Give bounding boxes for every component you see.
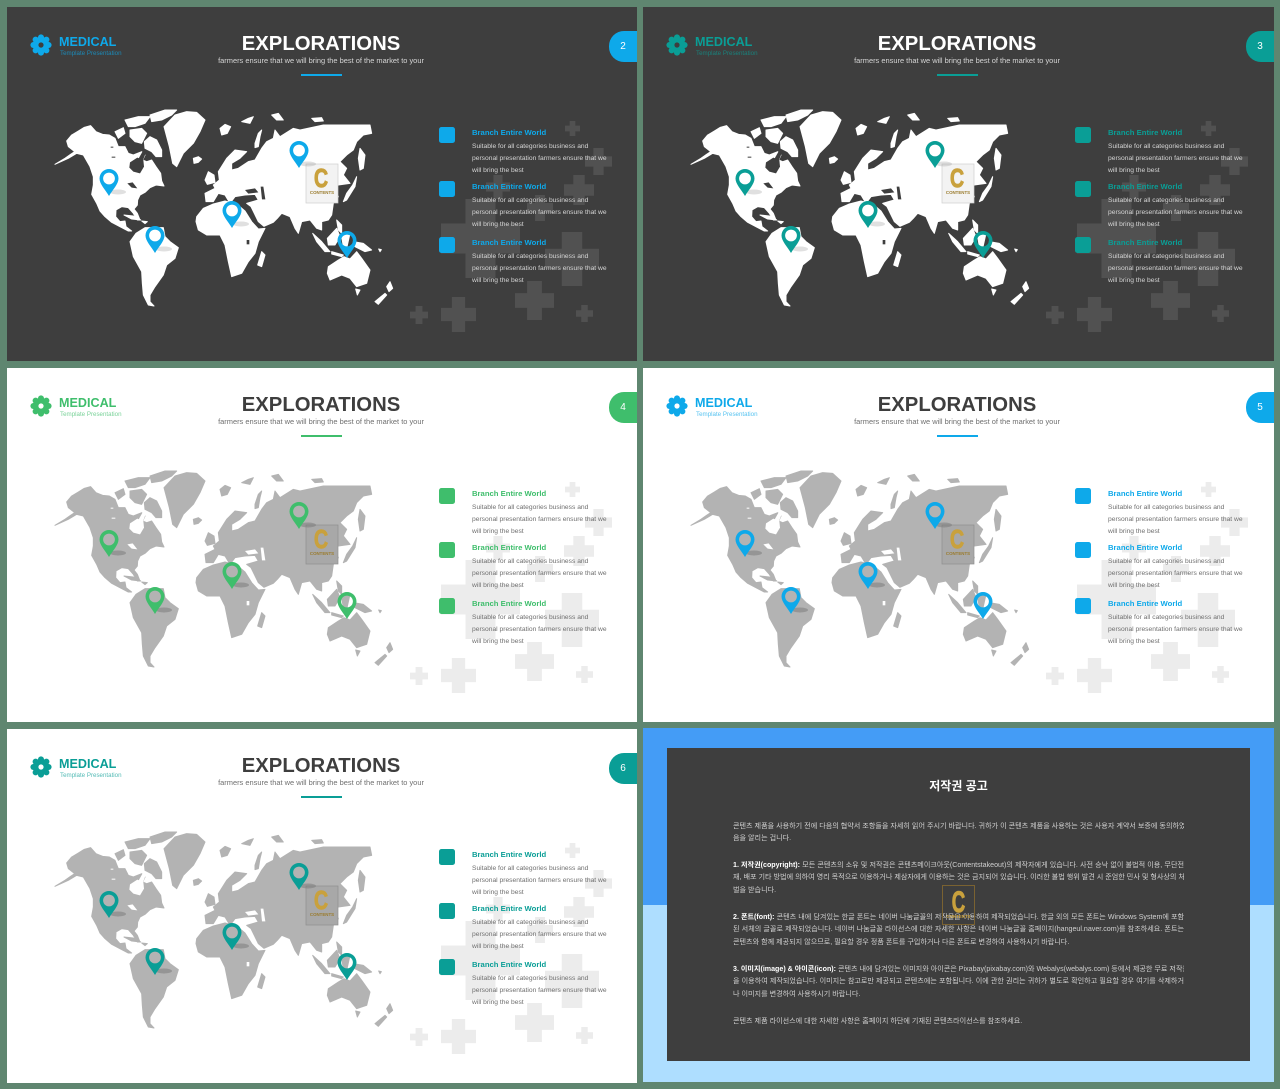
list item 1: Branch Entire World (1108, 128, 1182, 137)
list item 3: will bring the best (1108, 638, 1160, 645)
list item 2: Branch Entire World (472, 543, 546, 552)
list item 1 (439, 127, 607, 174)
logo text: Template Presentation (696, 50, 758, 57)
title: EXPLORATIONS (878, 394, 1036, 416)
logo text: Template Presentation (60, 411, 122, 418)
title (854, 33, 1060, 76)
page badge (609, 753, 637, 784)
list item 3: Branch Entire World (1108, 238, 1182, 247)
slide 2: dark blue (7, 7, 637, 361)
font paragraph (733, 913, 1184, 946)
list item 3: personal presentation farmers ensure that we (1108, 626, 1243, 633)
slide 5: light blue (643, 368, 1274, 722)
list item 3: personal presentation farmers ensure that we (1108, 265, 1243, 272)
list item 1: Branch Entire World (472, 489, 546, 498)
list item 1: Suitable for all categories business and (472, 143, 588, 150)
list item 2: Suitable for all categories business and (472, 919, 588, 926)
list item 2: Suitable for all categories business and (472, 197, 588, 204)
logo text: Template Presentation (60, 50, 122, 57)
logo gear icon (30, 395, 52, 417)
list item 1: Suitable for all categories business and (472, 865, 588, 872)
page badge: 2 (620, 41, 626, 52)
watermark (942, 524, 974, 564)
watermark (942, 163, 974, 203)
list item 2: personal presentation farmers ensure that we (1108, 209, 1243, 216)
font paragraph: 콘텐츠와 함께 제공되지 않으므로, 필요할 경우 정품 폰트를 구입하거나 다른 폰트로 변경하여 사용하시기 바랍니다. (733, 938, 1069, 946)
list item 2: Branch Entire World (472, 904, 546, 913)
page badge (609, 392, 637, 423)
list item 1: will bring the best (1108, 167, 1160, 174)
title: farmers ensure that we will bring the best of the market to your (218, 417, 424, 426)
world map (55, 832, 393, 1028)
copyright panel (667, 748, 1250, 1061)
font paragraph: 된 서체의 글꼴로 제작되었습니다. 네이버 나눔글꼴 라이선스에 대한 자세한 사항은 네이버 나눔글꼴 홈페이지(hangeul.naver.com)를 참조하세요. 폰트는 (733, 925, 1184, 933)
title (218, 755, 424, 798)
list item 1: Suitable for all categories business and (1108, 143, 1224, 150)
list item 1: Branch Entire World (472, 128, 546, 137)
license note: 콘텐츠 제품 라이선스에 대한 자세한 사항은 홈페이지 하단에 기재된 콘텐츠라이선스를 참조하세요. (733, 1017, 1022, 1025)
list item 1: personal presentation farmers ensure that we (472, 516, 607, 523)
list item 3: Branch Entire World (472, 599, 546, 608)
list item 1: Branch Entire World (1108, 489, 1182, 498)
list item 3 (439, 959, 607, 1006)
list item 2: personal presentation farmers ensure that we (472, 570, 607, 577)
list item 3 (1075, 237, 1243, 284)
logo text: MEDICAL (59, 757, 116, 771)
logo text: MEDICAL (59, 35, 116, 49)
list item 1 (1075, 488, 1243, 535)
list item 1: Suitable for all categories business and (1108, 504, 1224, 511)
watermark: CONTENTS (310, 551, 334, 556)
logo text: MEDICAL (695, 396, 752, 410)
list item 3: personal presentation farmers ensure that we (472, 987, 607, 994)
watermark: CONTENTS (946, 914, 971, 919)
list item 3 (1075, 598, 1243, 645)
background crosses (410, 482, 612, 693)
list item 3: Suitable for all categories business and (472, 614, 588, 621)
list item 2: personal presentation farmers ensure that we (472, 209, 607, 216)
list item 2: Suitable for all categories business and (1108, 197, 1224, 204)
list item 1: will bring the best (472, 889, 524, 896)
intro paragraph: 음을 알리는 겁니다. (733, 834, 791, 842)
logo text (59, 396, 122, 418)
watermark (942, 885, 975, 925)
list item 2 (439, 542, 607, 589)
map artwork with crosses and pins (30, 395, 612, 693)
list item 3: personal presentation farmers ensure that we (472, 626, 607, 633)
list item 1: Branch Entire World (472, 850, 546, 859)
location pins (100, 502, 356, 619)
watermark (306, 163, 338, 203)
list item 1: personal presentation farmers ensure that we (1108, 155, 1243, 162)
title: farmers ensure that we will bring the best of the market to your (854, 417, 1060, 426)
intro paragraph (733, 822, 1184, 842)
location pins (736, 502, 992, 619)
title: farmers ensure that we will bring the best of the market to your (218, 56, 424, 65)
watermark: C (950, 163, 964, 193)
list item 3: Branch Entire World (472, 960, 546, 969)
copyright paragraph (733, 861, 1184, 894)
map artwork with crosses and pins (666, 34, 1248, 332)
image paragraph: 3. 이미지(image) & 아이콘(icon): 콘텐츠 내에 담겨있는 이미지와 아이콘은 Pixabay(pixabay.com)와 Webalys(webalys.com) 등에서 제공한 무료 저작물 (733, 965, 1184, 973)
world map (55, 471, 393, 667)
list item 1 (1075, 127, 1243, 174)
watermark: C (314, 163, 328, 193)
list item 2: will bring the best (1108, 582, 1160, 589)
list item 3: will bring the best (472, 638, 524, 645)
copyright paragraph: 재, 배포 기타 방법에 의하여 영리 목적으로 이용하거나 제삼자에게 이용하는 것은 금지되어 있습니다. 이러한 불법 행위 발견 시 준엄한 민사 및 형사상의 처 (733, 873, 1184, 881)
list item 2: will bring the best (1108, 221, 1160, 228)
watermark: C (314, 885, 328, 915)
list item 1: will bring the best (472, 167, 524, 174)
title (218, 394, 424, 437)
copyright slide (643, 728, 1274, 1082)
logo gear icon (666, 34, 688, 56)
page badge (609, 31, 637, 62)
logo gear icon (30, 34, 52, 56)
page badge: 6 (620, 763, 626, 774)
page badge: 3 (1257, 41, 1263, 52)
list item 3: will bring the best (472, 999, 524, 1006)
background crosses (410, 121, 612, 332)
logo gear icon (666, 395, 688, 417)
watermark: CONTENTS (946, 551, 970, 556)
background crosses (1046, 121, 1248, 332)
title: farmers ensure that we will bring the best of the market to your (854, 56, 1060, 65)
world map (691, 471, 1029, 667)
image paragraph: 을 이용하여 제작되었습니다. 이미지는 참고로만 제공되고 콘텐츠에는 포함됩니다. 이에 관한 권리는 귀하가 별도로 확인하고 필요할 경우 여기를 삭제하거 (733, 977, 1184, 985)
list item 2 (439, 903, 607, 950)
list item 2: Branch Entire World (1108, 543, 1182, 552)
slide 6: light teal (7, 729, 637, 1083)
location pins (100, 863, 356, 980)
title: farmers ensure that we will bring the best of the market to your (218, 778, 424, 787)
copyright paragraph: 벌을 받습니다. (733, 886, 776, 894)
list item 1: personal presentation farmers ensure that we (1108, 516, 1243, 523)
list item 3: personal presentation farmers ensure that we (472, 265, 607, 272)
map artwork with crosses and pins (30, 756, 612, 1054)
list item 2: Branch Entire World (1108, 182, 1182, 191)
title: EXPLORATIONS (242, 33, 400, 55)
image paragraph: 나 이미지를 변경하여 사용하시기 바랍니다. (733, 990, 860, 998)
watermark: C (952, 886, 965, 919)
location pins (736, 141, 992, 258)
list item 1: Suitable for all categories business and (472, 504, 588, 511)
list item 3: Suitable for all categories business and (472, 253, 588, 260)
list item 3 (439, 237, 607, 284)
logo text (59, 35, 122, 57)
logo gear icon (30, 756, 52, 778)
list item 2: will bring the best (472, 943, 524, 950)
world map (55, 110, 393, 306)
list item 3: will bring the best (472, 277, 524, 284)
list item 1: personal presentation farmers ensure that we (472, 877, 607, 884)
list item 2 (1075, 181, 1243, 228)
watermark: CONTENTS (310, 912, 334, 917)
watermark: C (950, 524, 964, 554)
list item 1: will bring the best (1108, 528, 1160, 535)
list item 2: Suitable for all categories business and (472, 558, 588, 565)
copyright heading: 저작권 공고 (929, 779, 988, 793)
list item 3: will bring the best (1108, 277, 1160, 284)
page badge: 4 (620, 402, 626, 413)
world map (691, 110, 1029, 306)
list item 2 (1075, 542, 1243, 589)
list item 2: Suitable for all categories business and (1108, 558, 1224, 565)
logo text (695, 35, 758, 57)
list item 2: personal presentation farmers ensure that we (1108, 570, 1243, 577)
slide 4: light green (7, 368, 637, 722)
page badge (1246, 392, 1274, 423)
logo text: Template Presentation (696, 411, 758, 418)
location pins (100, 141, 356, 258)
page badge (1246, 31, 1274, 62)
watermark: CONTENTS (310, 190, 334, 195)
background crosses (410, 843, 612, 1054)
font paragraph: 2. 폰트(font): 콘텐츠 내에 담겨있는 한글 폰트는 네이버 나눔글꼴의 저작물을 이용하여 제작되었습니다. 한글 외의 모든 폰트는 Windows System에 포함 (733, 913, 1184, 921)
watermark (306, 524, 338, 564)
logo text: MEDICAL (59, 396, 116, 410)
list item 2: will bring the best (472, 582, 524, 589)
list item 3: Suitable for all categories business and (472, 975, 588, 982)
logo text (695, 396, 758, 418)
list item 1 (439, 849, 607, 896)
list item 1: personal presentation farmers ensure that we (472, 155, 607, 162)
title: EXPLORATIONS (242, 394, 400, 416)
map artwork with crosses and pins (666, 395, 1248, 693)
list item 2: Branch Entire World (472, 182, 546, 191)
list item 2 (439, 181, 607, 228)
list item 1: will bring the best (472, 528, 524, 535)
watermark (306, 885, 338, 925)
page badge: 5 (1257, 402, 1263, 413)
list item 3: Branch Entire World (1108, 599, 1182, 608)
copyright paragraph: 1. 저작권(copyright): 모든 콘텐츠의 소유 및 저작권은 콘텐츠메이크아웃(Contentstakeout)의 제작자에게 있습니다. 사전 승낙 없이 불법적 이용, 무단전 (733, 861, 1184, 869)
background crosses (1046, 482, 1248, 693)
list item 3: Suitable for all categories business and (1108, 253, 1224, 260)
list item 3: Suitable for all categories business and (1108, 614, 1224, 621)
watermark: CONTENTS (946, 190, 970, 195)
logo text: Template Presentation (60, 772, 122, 779)
logo text: MEDICAL (695, 35, 752, 49)
list item 3: Branch Entire World (472, 238, 546, 247)
title (854, 394, 1060, 437)
list item 2: personal presentation farmers ensure that we (472, 931, 607, 938)
watermark: C (314, 524, 328, 554)
title: EXPLORATIONS (242, 755, 400, 777)
logo text (59, 757, 122, 779)
map artwork with crosses and pins (30, 34, 612, 332)
title (218, 33, 424, 76)
list item 3 (439, 598, 607, 645)
list item 1 (439, 488, 607, 535)
title: EXPLORATIONS (878, 33, 1036, 55)
slide 3: dark teal (643, 7, 1274, 361)
image paragraph (733, 965, 1184, 998)
intro paragraph: 콘텐츠 제품을 사용하기 전에 다음의 협약서 조항들을 자세히 읽어 주시기 바랍니다. 귀하가 이 콘텐츠 제품을 사용하는 것은 사용자 계약서 보증에 동의하였 (733, 822, 1184, 830)
list item 2: will bring the best (472, 221, 524, 228)
